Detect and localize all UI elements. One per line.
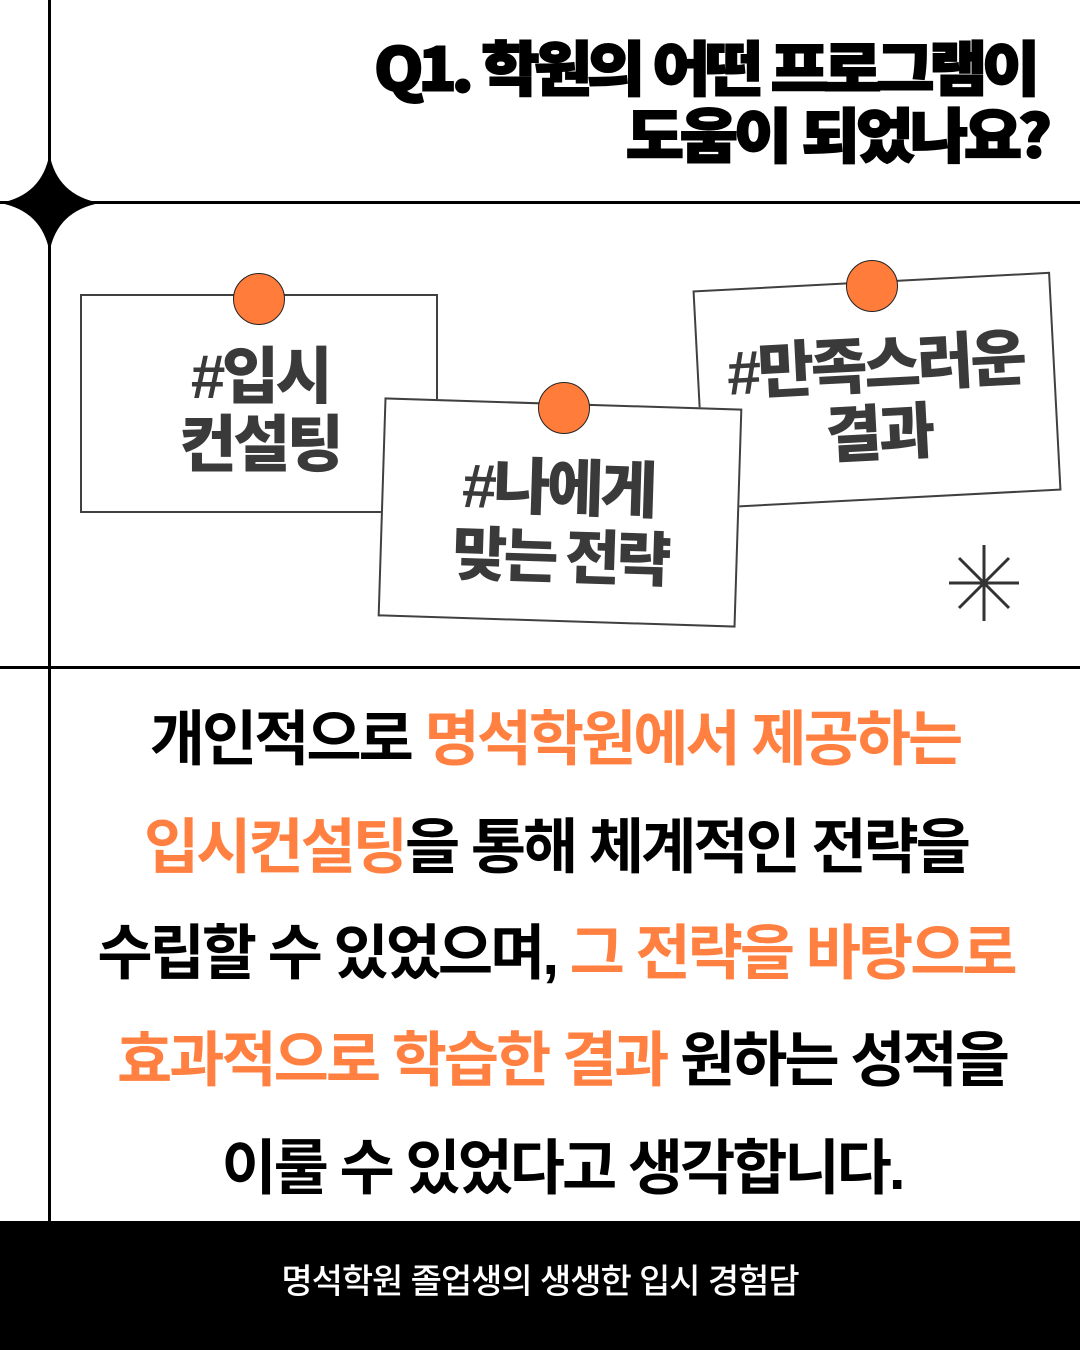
horizontal line under cards [0,666,1080,669]
pin: card one [233,273,285,325]
card: 입시 컨설팅 [80,294,438,513]
card: 만족스러운 결과 [693,272,1061,509]
body text: 입시컨설팅을 통해 체계적인 전략을 [144,814,968,881]
icon: asterisk sparkle [949,545,1019,621]
card: 나에게 맞는 전략: #나에게 [461,452,655,527]
horizontal line under title [0,201,1080,204]
card: 나에게 맞는 전략: 맞는 전략 [451,521,669,594]
card: 만족스러운 결과: #만족스러운 [725,324,1025,409]
body text: 효과적으로 학습한 결과 원하는 성적을 [117,1027,1007,1094]
body text: 개인적으로 명석학원에서 제공하는 [150,706,960,773]
pin: card three [846,260,898,312]
vertical frame line [48,0,51,1221]
footer text: 명석학원 졸업생의 생생한 입시 경험담 [281,1263,799,1301]
card: 만족스러운 결과: 결과 [824,397,934,472]
icon: four-point star at line crossing [4,160,96,246]
title second line: 도움이 되었나요? [626,90,1048,175]
footer bar [0,1221,1080,1350]
pin: card two [538,382,590,434]
body text: 이룰 수 있었다고 생각합니다. [221,1135,903,1202]
body text [97,706,1016,1202]
card: 입시 컨설팅: #입시 [191,343,329,412]
card: 입시 컨설팅: 컨설팅 [180,411,340,480]
card: 나에게 맞는 전략 [378,397,742,628]
title: Q1. 학원의 어떤 프로그램이 [374,23,1035,108]
body text: 수립할 수 있었으며, 그 전략을 바탕으로 [97,920,1015,987]
